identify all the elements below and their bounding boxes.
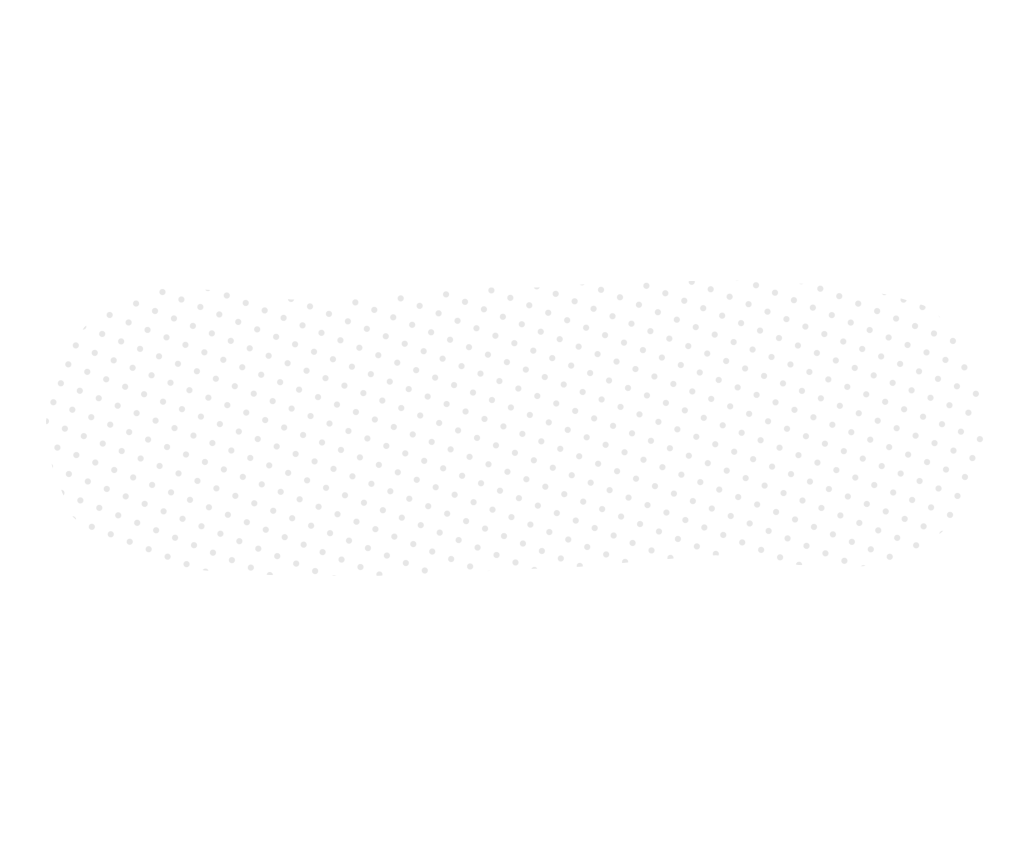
- dotted blob: [40, 275, 990, 580]
